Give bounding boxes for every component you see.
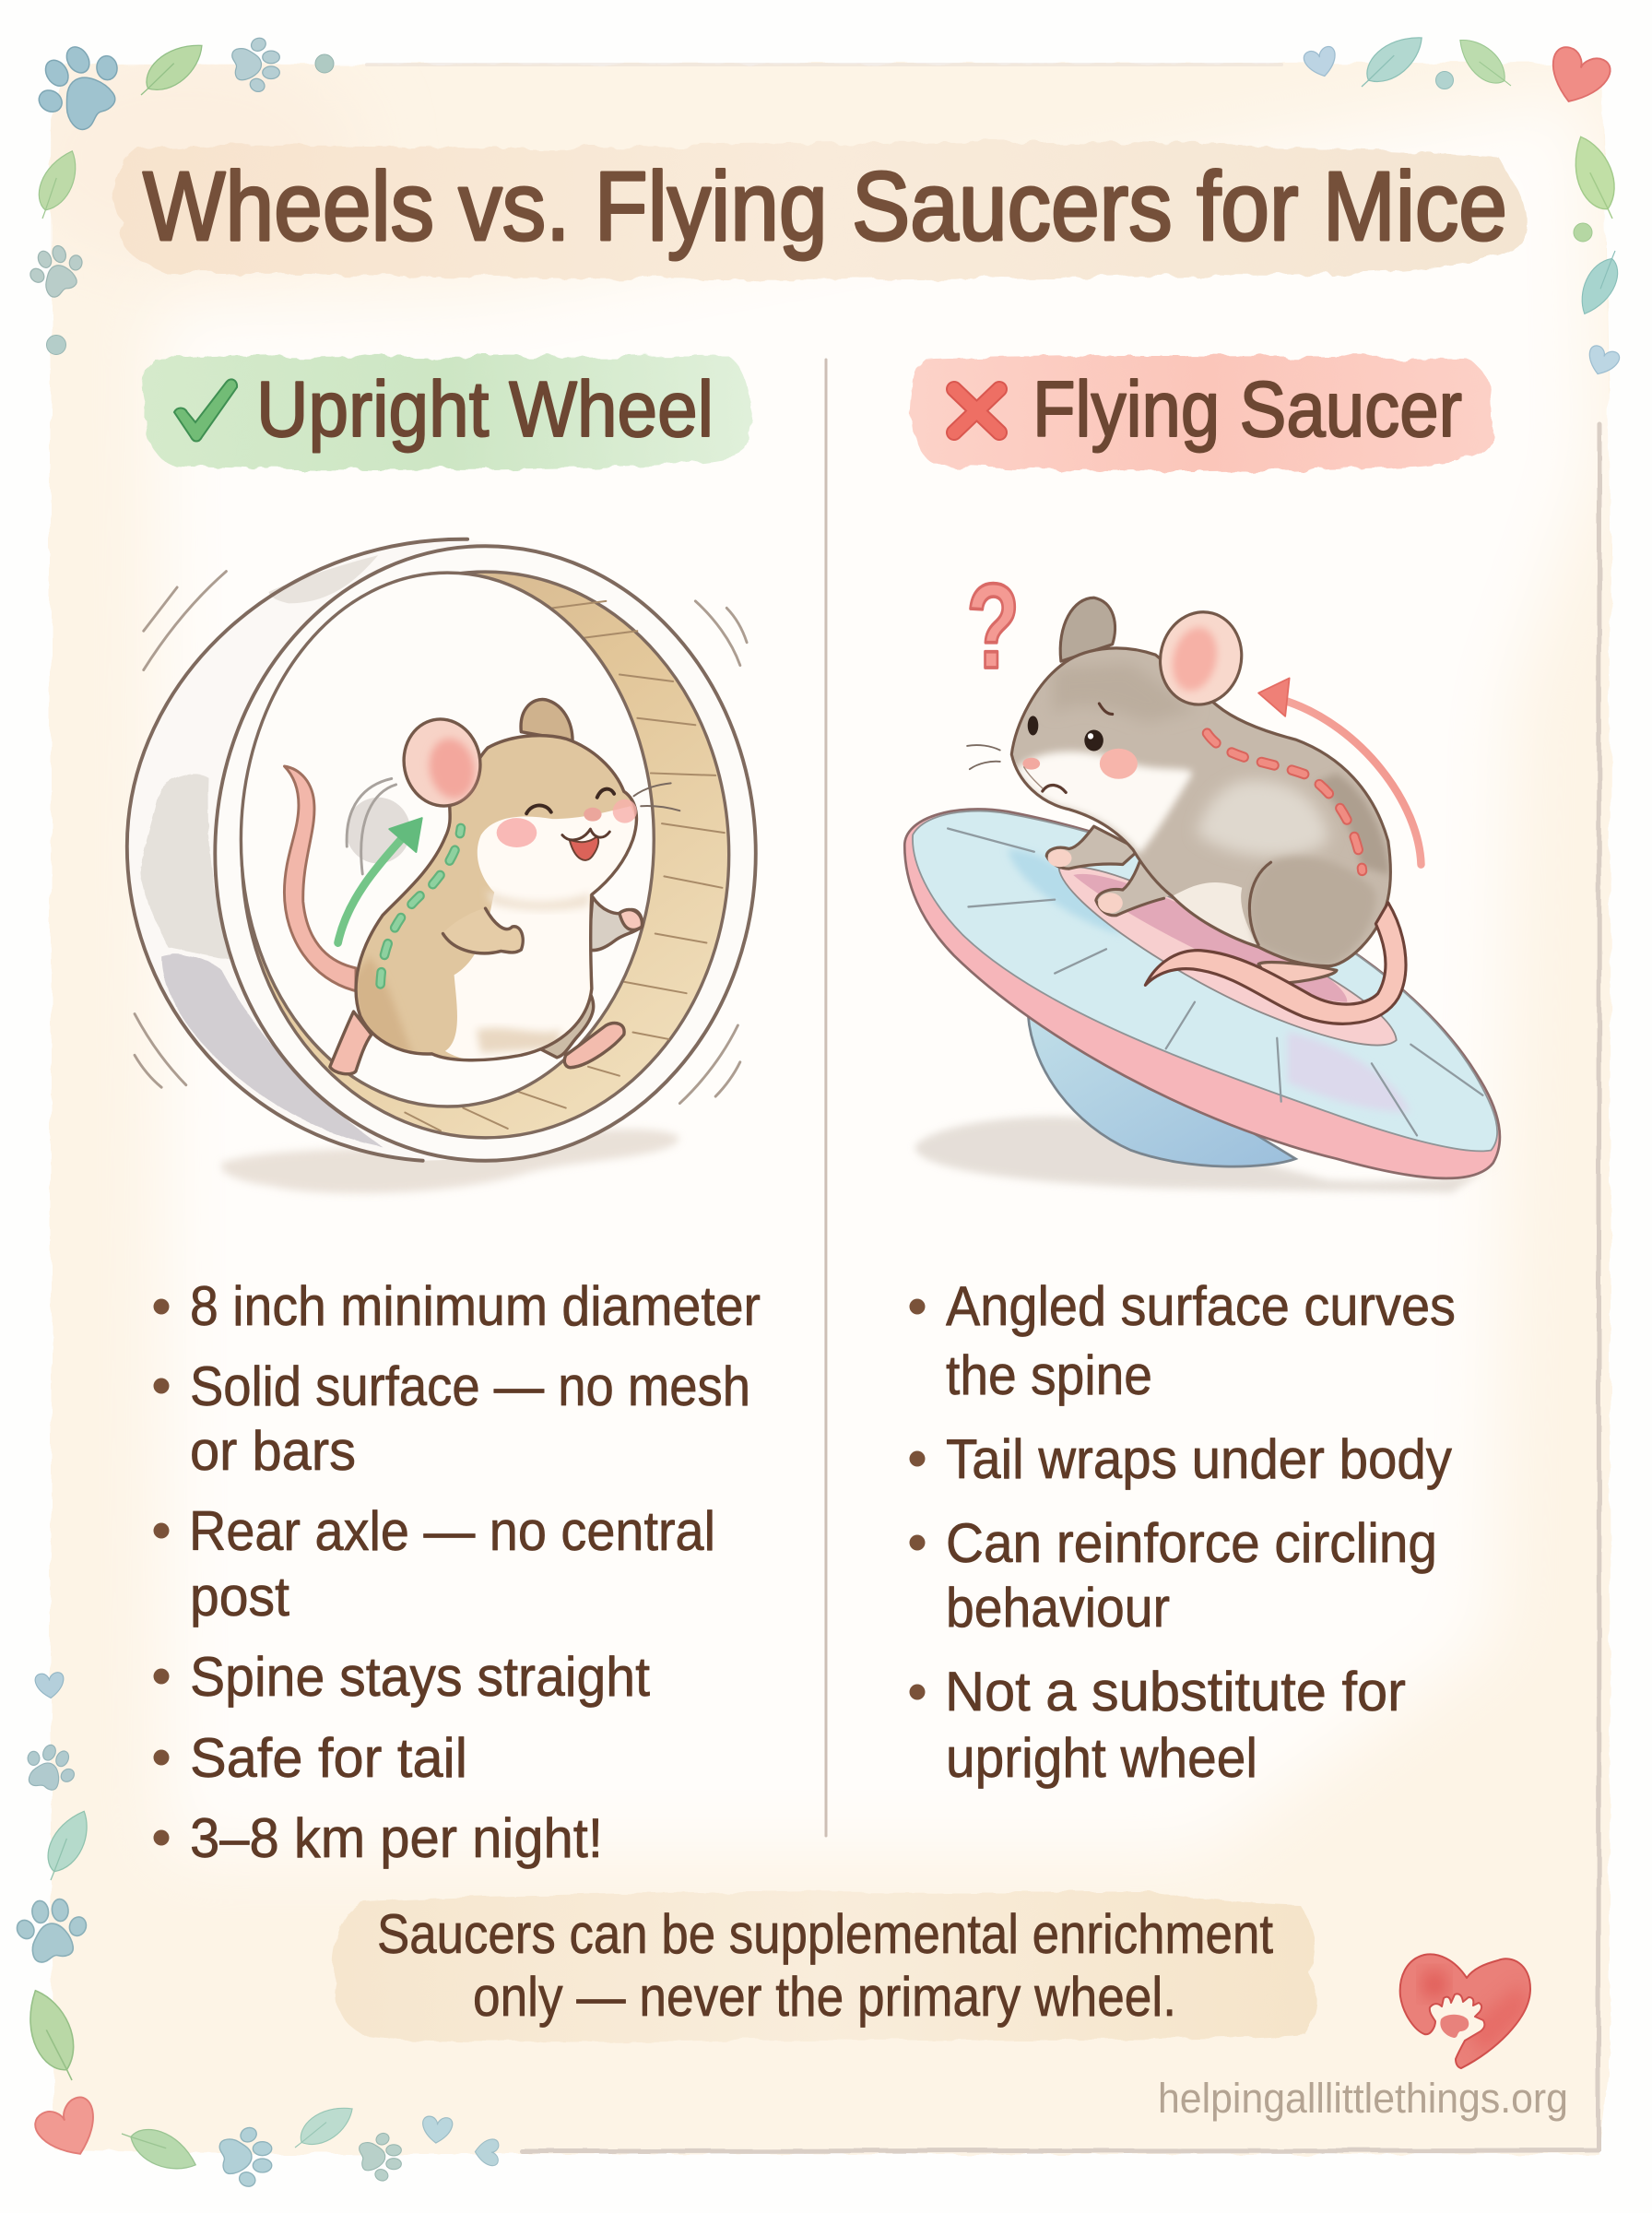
wheel rungs [405,601,725,1130]
bullet list: upright wheel: Spine stays straight [190,1646,650,1708]
mouse face [967,704,1138,792]
green spine dashes [381,828,461,984]
icon: large blue paw [20,30,141,145]
mouse far leg [539,984,624,1068]
wheel front ring [215,546,756,1161]
icon: green leaf top right [1451,30,1519,97]
icon: check mark [174,379,237,441]
icon: left dot [46,336,66,354]
panel: upright wheel [127,356,761,1869]
callout: summary: only — never the primary wheel. [473,1966,1176,2028]
mouse hind foot [1258,963,1337,983]
bullet list: upright wheel: Safe for tail [190,1727,467,1789]
question mark: ? [966,559,1020,693]
icon: bottom blue paw [219,2125,272,2189]
title text: Wheels vs. Flying Saucers for Mice [143,152,1507,261]
red spine dashes [1207,733,1363,870]
bullet list: flying saucer: upright wheel [946,1727,1257,1789]
bullet list: flying saucer: Angled surface curves [946,1275,1456,1337]
heading: flying saucer: Flying Saucer [1032,366,1462,454]
motion lines [135,572,747,1104]
bullet list: upright wheel: or bars [190,1420,356,1482]
logo: heart with paw [1400,1954,1530,2068]
icon: left leaf [28,145,86,224]
icon: right dot [1574,223,1592,242]
bullet list: upright wheel: 3–8 km per night! [190,1807,603,1869]
icon: lower left paw [16,1737,84,1800]
icon: red heart bottom left [31,2093,108,2166]
saucer top surface [913,811,1497,1151]
title banner [112,142,1526,279]
icon: lower left green leaf [17,1983,88,2088]
icon: red cross [954,389,999,432]
green arrow [338,818,422,942]
wheel shadow [221,1130,679,1193]
mouse near ear [1150,602,1252,714]
panel: flying saucer [904,356,1500,1789]
icon: red heart top right [1541,43,1613,112]
icon: right teal leaf [1573,245,1629,320]
icon: lower left teal leaf [35,1805,98,1887]
icon: small blue heart top [1303,45,1340,80]
icon: bottom sideways heart [475,2138,499,2166]
icon: top leaf [130,33,211,106]
mouse near arm [442,908,523,953]
icon: teal leaf top [1351,26,1431,98]
icon: right green leaf [1564,131,1627,225]
mouse far ear [521,700,572,741]
column divider [825,360,827,1836]
bullet list: flying saucer [909,1275,1456,1789]
icon: teal dot top [1436,72,1453,89]
wheel wood band [242,572,729,1138]
bullet list: upright wheel [153,1275,761,1869]
mouse far leg [1046,826,1139,869]
red arrow [1258,678,1421,865]
header: upright wheel [145,356,750,469]
mouse near ear [396,712,488,813]
icon: lower left large paw [12,1897,92,1964]
callout: summary [333,1892,1316,2041]
icon: top dot [315,54,334,73]
callout wash [333,1892,1316,2041]
mouse tail [284,766,356,991]
icon: bottom small paw [360,2131,401,2183]
mouse far arm [588,897,643,951]
bullet list: upright wheel: 8 inch minimum diameter [190,1275,761,1337]
bullet list: flying saucer: Tail wraps under body [946,1428,1452,1490]
icon: left paw [22,239,93,303]
mouse tail [1145,903,1406,1024]
icon: bottom teal leaf [287,2097,360,2158]
bullet list: upright wheel: post [190,1566,289,1627]
mouse back foot [330,1012,372,1074]
mouse near leg [1096,846,1205,916]
header: flying saucer [913,356,1493,471]
bullet list: upright wheel: Solid surface — no mesh [190,1355,750,1417]
saucer dome [1028,1015,1295,1166]
saucer shadow [914,1117,1497,1192]
title wash [112,142,1526,279]
mouse face [497,783,679,860]
icon: bottom green leaf [116,2117,202,2179]
icon: lower left blue heart [35,1672,65,1699]
illustration: mouse on saucer [904,559,1500,1192]
icon: right blue heart [1584,344,1621,379]
callout text: Saucers can be supplemental enrichment [377,1903,1273,1965]
saucer rim [904,810,1500,1178]
bullet list: flying saucer: Can reinforce circling [946,1512,1437,1574]
website footer: helpingalllittlethings.org [1158,2075,1568,2122]
wheel back rim [127,539,494,1161]
wheel axle [346,778,410,874]
illustration: mouse in wheel [127,539,756,1193]
bullet list: flying saucer: the spine [946,1344,1152,1406]
mouse body [1011,648,1390,966]
mouse far ear [1060,598,1115,661]
bullet list: flying saucer: Not a substitute for [945,1661,1406,1722]
saucer centre pad [1059,867,1397,1045]
bullet list: flying saucer: behaviour [946,1577,1170,1639]
icon: bottom blue heart [421,2116,453,2144]
bullet list: upright wheel: Rear axle — no central [189,1500,715,1562]
icon: top paw [232,36,279,94]
wheel opening [241,573,654,1106]
heading: upright wheel: Upright Wheel [256,366,714,454]
mouse body [351,736,636,1061]
